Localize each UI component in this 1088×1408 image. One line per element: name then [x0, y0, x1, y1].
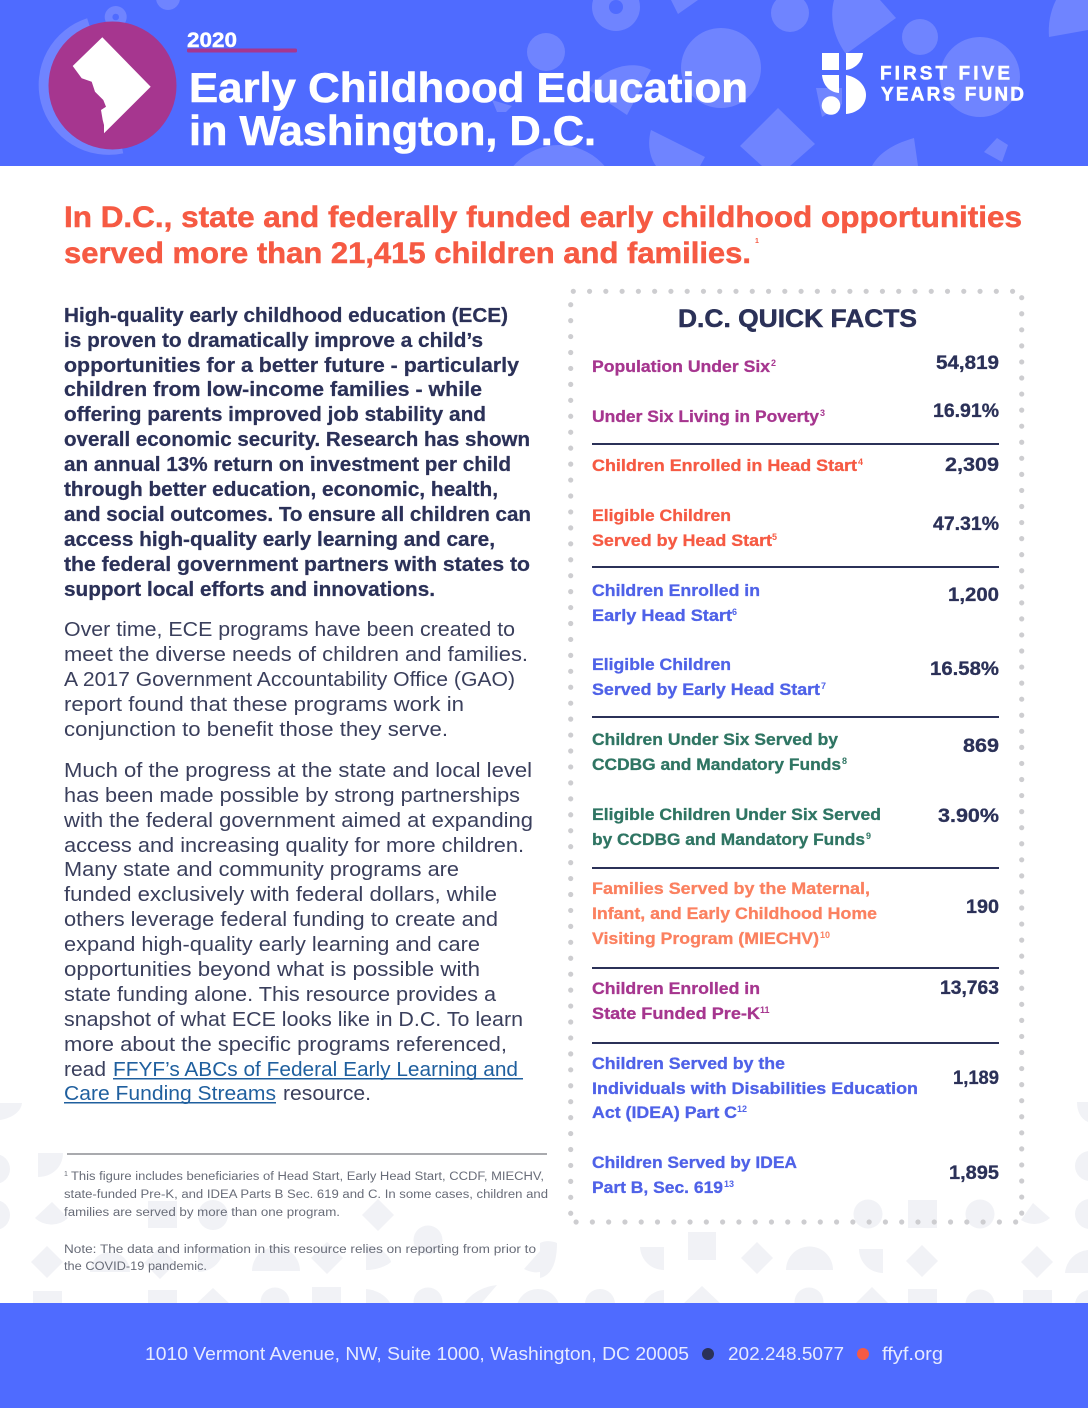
fact: population under six: [592, 352, 999, 376]
paragraph: federal partnerships: state funding alone. This resource provides a: [64, 984, 497, 1006]
intro paragraph (bold): [64, 305, 531, 601]
footer bar: [0, 1303, 1088, 1408]
fact: CCDBG children: 869: [963, 735, 999, 757]
paragraph: ECE programs: report found that these programs work in: [64, 694, 464, 716]
header banner: [0, 0, 1088, 166]
fact: eligible CCDBG children: Eligible Children Under Six Served: [592, 805, 881, 824]
paragraph: federal partnerships: has been made possible by strong partnerships: [64, 785, 520, 807]
fact: CCDBG children: Children Under Six Served by: [592, 730, 839, 749]
logo: First Five Years Fund: FIRST FIVE: [880, 63, 1010, 84]
fact: eligible CCDBG children: 9: [866, 831, 871, 841]
fact: IDEA Part C: 12: [737, 1104, 747, 1114]
fact: population under six: Population Under Six: [592, 357, 771, 376]
fact: under six in poverty: Under Six Living in Poverty: [592, 407, 820, 426]
fact: CCDBG children: [592, 730, 999, 774]
paragraph: federal partnerships: [63, 760, 533, 1105]
fact: IDEA Part C: [592, 1054, 999, 1122]
fact: eligible head start: [592, 506, 999, 550]
footnotes: [64, 1153, 548, 1273]
intro paragraph (bold): overall economic security. Research has shown: [64, 429, 530, 451]
headline: [64, 201, 1022, 270]
fact: population under six: 54,819: [936, 352, 999, 374]
paragraph: ECE programs: meet the diverse needs of children and families.: [64, 644, 528, 666]
icon: D.C. map badge: [45, 6, 176, 150]
fact: head start enrollment: Children Enrolled in Head Start: [592, 456, 857, 475]
fact: IDEA Part B: 13: [724, 1179, 734, 1189]
fact: state pre-K: 11: [760, 1005, 770, 1015]
footnotes: This figure includes beneficiaries of Head Start, Early Head Start, CCDF, MIECHV,: [71, 1171, 544, 1183]
fact: state pre-K: 13,763: [940, 977, 999, 999]
paragraph: federal partnerships: resource.: [283, 1083, 371, 1105]
fact: IDEA Part C: Children Served by the: [592, 1054, 785, 1073]
footnotes: 1: [64, 1171, 68, 1178]
paragraph: federal partnerships: with the federal government aimed at expanding: [63, 810, 533, 832]
paragraph: ECE programs: [64, 619, 528, 741]
fact: eligible CCDBG children: [592, 805, 999, 849]
fact: state pre-K: Children Enrolled in: [592, 979, 760, 998]
title: in Washington, D.C.: [189, 107, 596, 154]
fact: MIECHV: 190: [966, 896, 999, 918]
fact: MIECHV: Visiting Program (MIECHV): [592, 929, 819, 948]
fact: IDEA Part B: Part B, Sec. 619: [592, 1178, 723, 1197]
paragraph: federal partnerships: opportunities beyond what is possible with: [64, 959, 480, 981]
fact: IDEA Part B: 1,895: [949, 1162, 999, 1184]
intro paragraph (bold): children from low-income families - while: [64, 379, 482, 401]
panel heading: D.C. QUICK FACTS: [678, 305, 917, 333]
year label: [187, 29, 297, 52]
paragraph: federal partnerships: Many state and community programs are: [64, 859, 459, 881]
intro paragraph (bold): an annual 13% return on investment per child: [64, 454, 511, 476]
fact: IDEA Part B: [592, 1153, 999, 1197]
fact: eligible early head start: 7: [821, 681, 826, 691]
intro paragraph (bold): support local efforts and innovations.: [64, 579, 435, 601]
headline: In D.C., state and federally funded early childhood opportunities: [64, 201, 1022, 234]
fact: early head start enrollment: Early Head Start: [592, 606, 732, 625]
fact: MIECHV: [592, 879, 999, 948]
intro paragraph (bold): is proven to dramatically improve a child’s: [64, 330, 483, 352]
paragraph: federal partnerships: snapshot of what ECE looks like in D.C. To learn: [64, 1009, 523, 1031]
footnotes: Note: The data and information in this resource relies on reporting from prior to: [64, 1244, 536, 1256]
paragraph: federal partnerships: others leverage federal funding to create and: [64, 909, 498, 931]
fact: eligible CCDBG children: by CCDBG and Mandatory Funds: [592, 830, 865, 849]
fact: CCDBG children: CCDBG and Mandatory Funds: [592, 755, 841, 774]
fact: IDEA Part B: Children Served by IDEA: [592, 1153, 797, 1172]
intro paragraph (bold): the federal government partners with states to: [64, 554, 530, 576]
intro paragraph (bold): offering parents improved job stability and: [64, 404, 486, 426]
intro paragraph (bold): High-quality early childhood education (ECE): [64, 305, 508, 327]
fact: eligible early head start: Eligible Children: [592, 655, 731, 674]
fact: early head start enrollment: 6: [732, 607, 737, 617]
paragraph: federal partnerships: Much of the progress at the state and local level: [64, 760, 532, 782]
footer phone: 202.248.5077: [728, 1344, 844, 1364]
fact: under six in poverty: 16.91%: [933, 400, 999, 422]
fact: eligible head start: Served by Head Start: [592, 531, 772, 550]
paragraph: federal partnerships: more about the specific programs referenced,: [64, 1034, 507, 1056]
fact: head start enrollment: 4: [858, 457, 863, 467]
fact: eligible head start: Eligible Children: [592, 506, 731, 525]
paragraph: ECE programs: Over time, ECE programs have been created to: [64, 619, 515, 641]
headline: 1: [755, 238, 759, 245]
panel: D.C. quick facts: [571, 291, 1022, 1222]
fact: eligible CCDBG children: 3.90%: [938, 805, 999, 827]
title: Early Childhood Education: [189, 64, 748, 111]
fact: IDEA Part C: Act (IDEA) Part C: [592, 1103, 737, 1122]
paragraph: federal partnerships: Care Funding Streams: [64, 1083, 276, 1105]
paragraph: federal partnerships: expand high-quality early learning and care: [64, 934, 480, 956]
fact: under six in poverty: [592, 400, 999, 426]
paragraph: federal partnerships: access and increasing quality for more children.: [64, 835, 524, 857]
fact: IDEA Part C: 1,189: [953, 1067, 999, 1089]
fact: IDEA Part C: Individuals with Disabilities Education: [592, 1079, 918, 1098]
fact: state pre-K: [592, 977, 999, 1023]
paragraph: federal partnerships: read: [64, 1059, 106, 1081]
logo: First Five Years Fund: YEARS FUND: [881, 84, 1024, 106]
logo: First Five Years Fund: [822, 53, 1024, 115]
footnotes: families are served by more than one program.: [64, 1207, 340, 1219]
year label: 2020: [187, 29, 237, 52]
fact: state pre-K: State Funded Pre-K: [592, 1004, 761, 1023]
fact: MIECHV: Infant, and Early Childhood Home: [592, 904, 877, 923]
fact: CCDBG children: 8: [842, 756, 847, 766]
footer website: ffyf.org: [882, 1344, 943, 1364]
fact: eligible early head start: Served by Early Head Start: [592, 680, 820, 699]
fact: MIECHV: 10: [820, 930, 830, 940]
fact: early head start enrollment: [592, 581, 999, 625]
fact: early head start enrollment: Children Enrolled in: [592, 581, 760, 600]
fact: MIECHV: Families Served by the Maternal,: [592, 879, 870, 898]
intro paragraph (bold): access high-quality early learning and care,: [64, 529, 495, 551]
fact: under six in poverty: 3: [820, 408, 825, 418]
footnotes: state-funded Pre-K, and IDEA Parts B Sec. 619 and C. In some cases, children and: [64, 1189, 548, 1201]
fact: population under six: 2: [771, 358, 776, 368]
fact: eligible head start: 47.31%: [933, 513, 999, 535]
fact: early head start enrollment: 1,200: [948, 584, 999, 606]
fact: eligible head start: 5: [772, 532, 777, 542]
title: [189, 64, 748, 154]
paragraph: federal partnerships: funded exclusively with federal dollars, while: [64, 884, 497, 906]
paragraph: ECE programs: conjunction to benefit those they serve.: [64, 719, 448, 741]
intro paragraph (bold): opportunities for a better future - particularly: [64, 355, 520, 377]
paragraph: federal partnerships: FFYF’s ABCs of Federal Early Learning and: [113, 1059, 518, 1081]
footnotes: the COVID-19 pandemic.: [64, 1261, 207, 1273]
fact: eligible early head start: 16.58%: [930, 658, 999, 680]
paragraph: ECE programs: A 2017 Government Accountability Office (GAO): [64, 669, 515, 691]
fact: head start enrollment: 2,309: [945, 454, 999, 476]
headline: served more than 21,415 children and families.: [64, 237, 751, 270]
footer address: 1010 Vermont Avenue, NW, Suite 1000, Washington, DC 20005: [145, 1344, 689, 1364]
intro paragraph (bold): and social outcomes. To ensure all children can: [64, 504, 531, 526]
fact: eligible early head start: [592, 655, 999, 699]
intro paragraph (bold): through better education, economic, health,: [64, 479, 498, 501]
fact: head start enrollment: [592, 454, 999, 476]
